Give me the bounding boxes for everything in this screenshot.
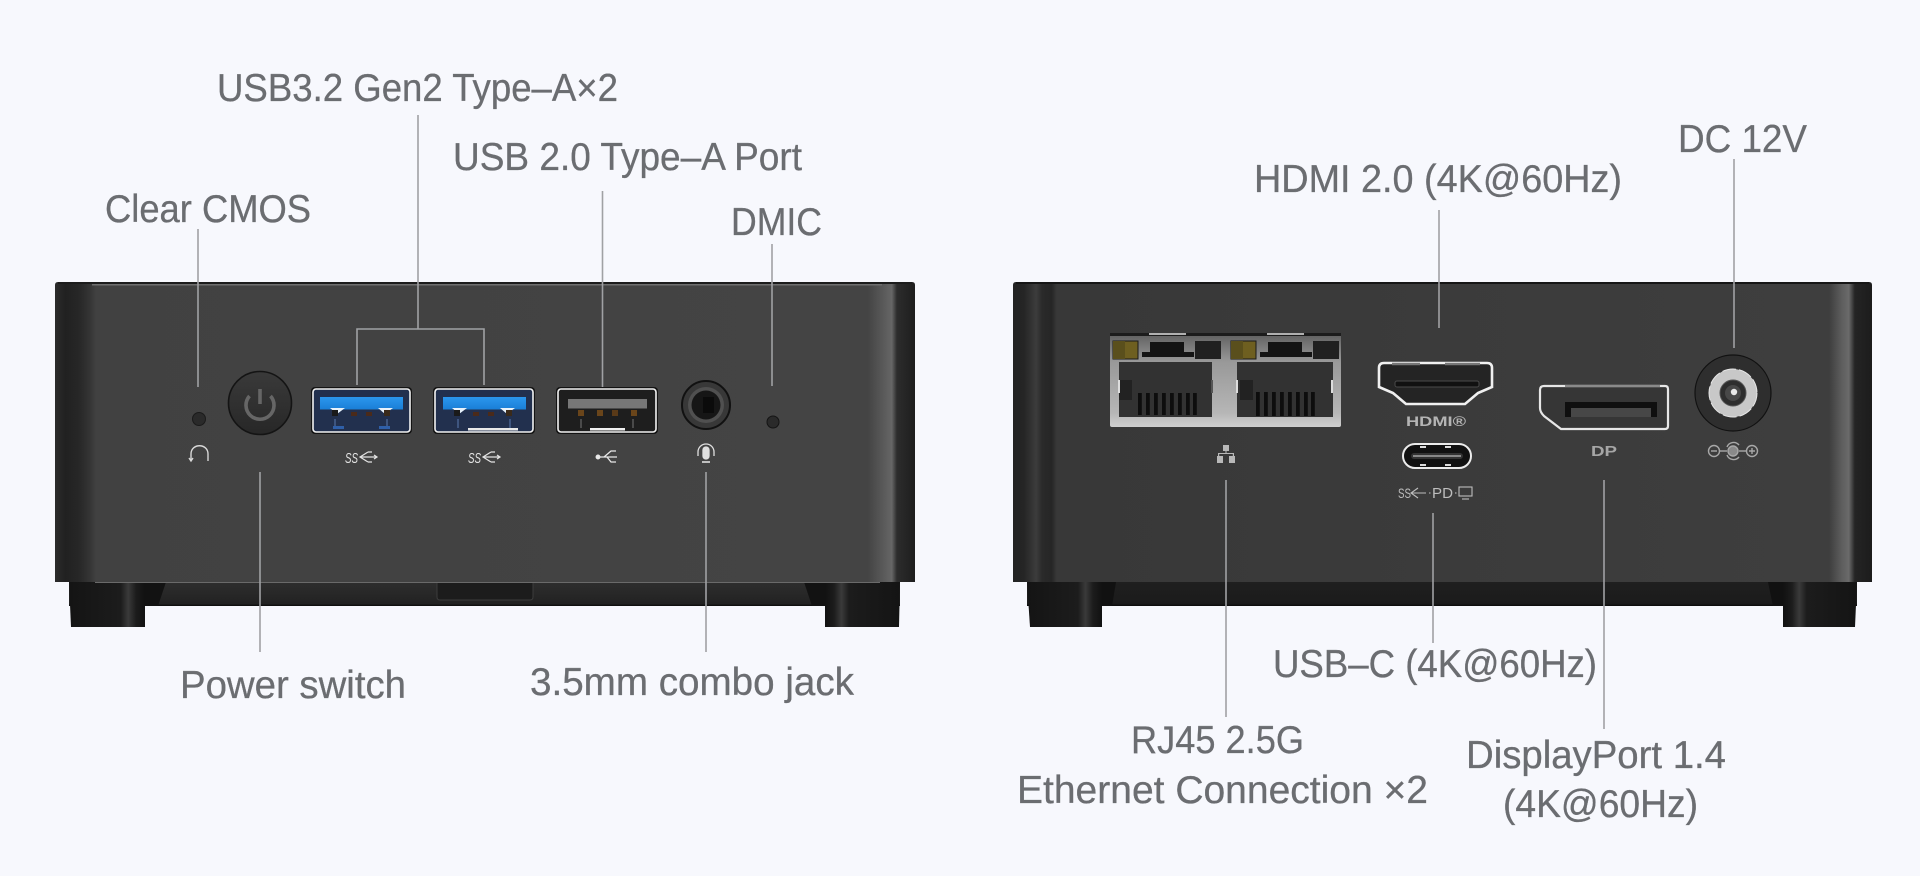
label: 3.5mm combo jack: 3.5mm combo jack bbox=[530, 661, 854, 704]
rear left foot bbox=[1027, 582, 1116, 627]
label: RJ45 bbox=[1017, 719, 1428, 812]
front right foot bbox=[804, 582, 900, 627]
icon: USB-C features bbox=[1398, 485, 1472, 502]
icon: headset mic bbox=[698, 444, 714, 462]
icon: USB-C features: PD bbox=[1432, 486, 1453, 502]
port: USB 2.0 Type-A bbox=[556, 387, 658, 434]
port: USB3.2 Type-A 2 bbox=[433, 387, 535, 434]
right socket bbox=[1231, 341, 1339, 417]
label: RJ45: RJ45 2.5G bbox=[1131, 719, 1304, 762]
label: Power switch: Power switch bbox=[180, 664, 406, 707]
port: DisplayPort bbox=[1540, 386, 1668, 429]
label: USB3.2: USB3.2 Gen2 Type–A×2 bbox=[217, 67, 618, 110]
port: 3.5mm combo jack bbox=[682, 381, 730, 429]
HDMI logo: HDMI® bbox=[1406, 413, 1467, 429]
DP label: DP bbox=[1591, 443, 1617, 460]
clear CMOS hole bbox=[192, 412, 206, 426]
bottom notch bbox=[437, 582, 533, 600]
left socket bbox=[1113, 341, 1221, 417]
leader lines bbox=[198, 115, 1734, 729]
label: DisplayPort: (4K@60Hz) bbox=[1503, 783, 1698, 826]
icon: network bbox=[1217, 445, 1235, 463]
label: USB 2.0: USB 2.0 Type–A Port bbox=[453, 136, 802, 179]
front face bbox=[55, 282, 915, 582]
underside band bbox=[69, 582, 900, 606]
icon: DC polarity bbox=[1708, 442, 1758, 460]
port: HDMI bbox=[1379, 363, 1492, 404]
port: USB-C bbox=[1403, 444, 1471, 468]
DMIC hole bbox=[767, 416, 779, 428]
icon: clear CMOS symbol bbox=[189, 446, 208, 461]
icon: SuperSpeed USB 1 bbox=[345, 450, 377, 467]
port: DC jack bbox=[1695, 355, 1771, 431]
label: DisplayPort bbox=[1466, 734, 1726, 826]
label: RJ45: Ethernet Connection ×2 bbox=[1017, 769, 1428, 812]
label: DisplayPort: DisplayPort 1.4 bbox=[1466, 734, 1726, 777]
rear face bbox=[1013, 282, 1872, 582]
label: HDMI: HDMI 2.0 (4K@60Hz) bbox=[1254, 158, 1622, 201]
port: dual RJ45 bbox=[1110, 333, 1341, 427]
label: DC 12V: DC 12V bbox=[1678, 118, 1807, 161]
panel: front of mini PC bbox=[55, 282, 915, 627]
icon: USB bbox=[596, 451, 617, 462]
icon: SuperSpeed USB 1: SS bbox=[345, 450, 358, 467]
rear right foot bbox=[1768, 582, 1857, 627]
icon: SuperSpeed USB 2 bbox=[468, 450, 500, 467]
label: DMIC: DMIC bbox=[731, 201, 822, 244]
front left foot bbox=[69, 582, 166, 627]
underside band bbox=[1027, 582, 1857, 606]
icon: SuperSpeed USB 2: SS bbox=[468, 450, 481, 467]
icon: USB-C features: SS bbox=[1398, 485, 1411, 501]
power button bbox=[228, 372, 292, 434]
label: Clear CMOS: Clear CMOS bbox=[105, 188, 311, 231]
label: USB-C: USB–C (4K@60Hz) bbox=[1273, 643, 1597, 686]
port: USB3.2 Type-A 1 bbox=[311, 387, 412, 434]
panel: rear of mini PC bbox=[1013, 282, 1872, 627]
